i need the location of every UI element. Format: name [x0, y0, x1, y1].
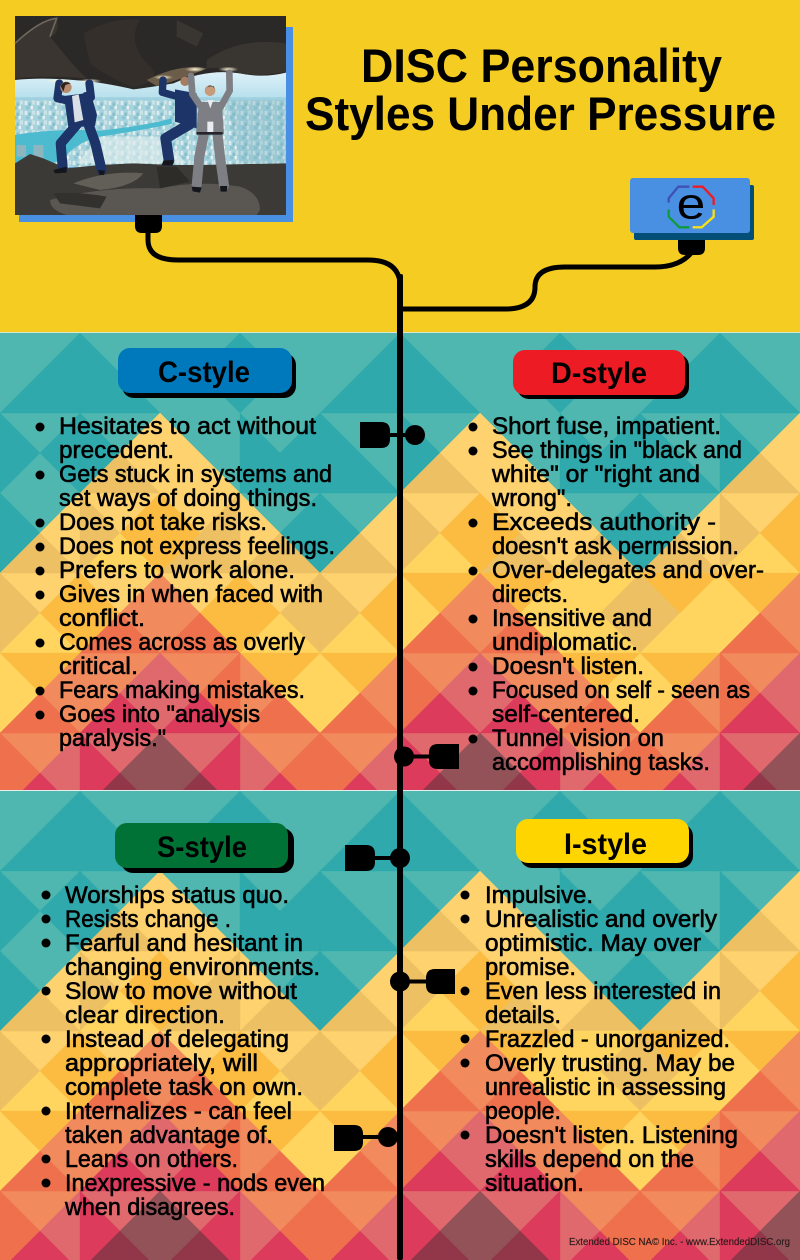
list: C-style traits: Does not take risks. — [59, 509, 267, 536]
list: I-style traits: unrealistic in assessing — [485, 1074, 726, 1101]
list: C-style traits — [36, 413, 335, 752]
list: I-style traits: Doesn't listen. Listening — [485, 1122, 738, 1149]
list: D-style traits: Tunnel vision on — [492, 725, 664, 752]
panel: C-style background — [0, 333, 400, 813]
badge: C-style: C-style — [158, 356, 250, 389]
list: I-style traits: Even less interested in — [485, 978, 721, 1005]
list: I-style traits: details. — [485, 1002, 561, 1029]
title: DISC Personality — [361, 39, 722, 92]
list: C-style traits: Does not express feelings. — [59, 533, 335, 560]
list: S-style traits — [42, 882, 325, 1221]
badge: I-style: I-style — [564, 828, 647, 861]
connector: I panel — [390, 969, 455, 994]
list: I-style traits: Frazzled - unorganized. — [485, 1026, 730, 1053]
panel: S-style background — [0, 791, 400, 1260]
badge: D-style — [513, 350, 689, 399]
list: D-style traits: accomplishing tasks. — [492, 749, 710, 776]
panel: D-style background — [400, 333, 800, 813]
cable: photo to centre line — [148, 232, 400, 282]
list: C-style traits: Comes across as overly — [59, 629, 305, 656]
badge: I-style — [516, 819, 693, 868]
header background — [0, 0, 800, 333]
list: S-style traits: clear direction. — [65, 1002, 225, 1029]
list: S-style traits: appropriately, will — [65, 1050, 258, 1077]
list: D-style traits: Over-delegates and over- — [492, 557, 764, 584]
list: I-style traits: Unrealistic and overly — [485, 906, 717, 933]
list: C-style traits: precedent. — [59, 437, 174, 464]
footer credit: Extended DISC NA© Inc. - www.ExtendedDISC.org — [569, 1237, 790, 1248]
logo card — [630, 178, 754, 240]
list: D-style traits: self-centered. — [492, 701, 640, 728]
list: C-style traits: Prefers to work alone. — [59, 557, 295, 584]
connector: S panel lower — [334, 1125, 398, 1151]
list: I-style traits: Overly trusting. May be — [485, 1050, 735, 1077]
list: I-style traits: Impulsive. — [485, 882, 593, 909]
list: I-style traits: people. — [485, 1098, 561, 1125]
list: S-style traits: taken advantage of. — [65, 1122, 273, 1149]
list: D-style traits — [468, 413, 764, 776]
connector: C panel — [360, 422, 425, 448]
list: S-style traits: when disagrees. — [64, 1194, 235, 1221]
list: S-style traits: Inexpressive - nods even — [65, 1170, 325, 1197]
list: D-style traits: directs. — [492, 581, 568, 608]
title — [305, 39, 776, 140]
photo plug — [135, 215, 162, 233]
list: D-style traits: white" or "right and — [491, 461, 700, 488]
list: S-style traits: Slow to move without — [65, 978, 297, 1005]
list: C-style traits: Fears making mistakes. — [59, 677, 305, 704]
list: D-style traits: doesn't ask permission. — [492, 533, 739, 560]
list: S-style traits: Fearful and hesitant in — [65, 930, 303, 957]
list: I-style traits: situation. — [485, 1170, 584, 1197]
list: C-style traits: set ways of doing things. — [59, 485, 317, 512]
list: S-style traits: Worships status quo. — [65, 882, 289, 909]
list: C-style traits: critical. — [59, 653, 138, 680]
connector: S panel upper — [345, 845, 410, 871]
title: Styles Under Pressure — [305, 87, 776, 140]
list: I-style traits: skills depend on the — [485, 1146, 694, 1173]
list: I-style traits: optimistic. May over — [485, 930, 701, 957]
list: I-style traits — [460, 882, 738, 1197]
list: C-style traits: Hesitates to act without — [59, 413, 316, 440]
list: C-style traits: Gives in when faced with — [59, 581, 323, 608]
list: D-style traits: Exceeds authority - — [492, 509, 716, 536]
list: S-style traits: Leans on others. — [65, 1146, 238, 1173]
list: C-style traits: Goes into "analysis — [59, 701, 260, 728]
list: C-style traits: paralysis." — [59, 725, 166, 752]
badge: C-style — [118, 348, 296, 398]
list: D-style traits: Short fuse, impatient. — [492, 413, 721, 440]
panel: I-style background — [400, 791, 800, 1260]
badge: D-style: D-style — [551, 357, 647, 390]
list: D-style traits: Insensitive and — [492, 605, 652, 632]
list: D-style traits: Focused on self - seen as — [492, 677, 750, 704]
cable: logo to centre line — [400, 252, 692, 309]
badge: S-style — [115, 823, 294, 873]
list: S-style traits: Instead of delegating — [65, 1026, 289, 1053]
centre spine line — [397, 274, 403, 1260]
list: C-style traits: Gets stuck in systems and — [59, 461, 332, 488]
list: S-style traits: Internalizes - can feel — [65, 1098, 292, 1125]
list: D-style traits: Doesn't listen. — [492, 653, 644, 680]
list: D-style traits: wrong". — [491, 485, 572, 512]
icon: octagon e logo: e — [677, 180, 705, 229]
list: D-style traits: See things in "black and — [492, 437, 742, 464]
photo: businessmen holding up a rock — [15, 16, 293, 222]
list: D-style traits: undiplomatic. — [492, 629, 638, 656]
list: I-style traits: promise. — [485, 954, 576, 981]
list: S-style traits: changing environments. — [65, 954, 320, 981]
list: S-style traits: Resists change . — [65, 906, 231, 933]
logo plug — [678, 238, 705, 255]
list: C-style traits: conflict. — [59, 605, 145, 632]
badge: S-style: S-style — [157, 831, 247, 864]
list: S-style traits: complete task on own. — [65, 1074, 303, 1101]
connector: D panel — [394, 744, 459, 769]
